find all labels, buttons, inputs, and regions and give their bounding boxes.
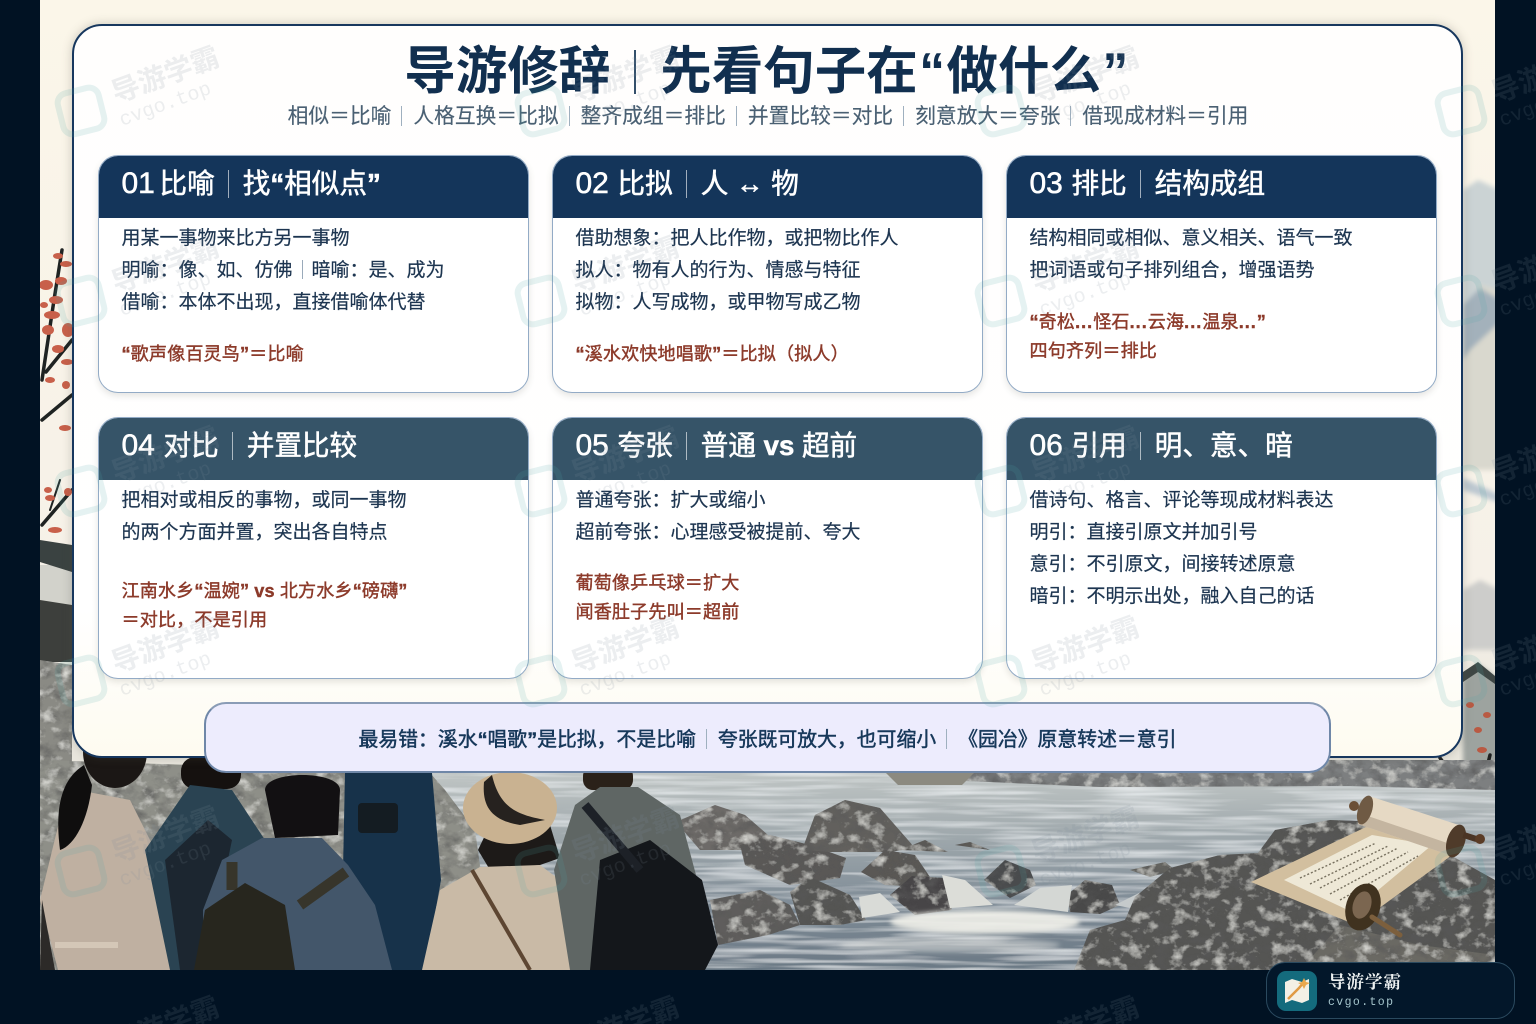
right branch [1438, 702, 1492, 760]
title: 导游修辞 先看句子在“做什么” [404, 42, 1128, 100]
text: 03 effect: 把词语或句子排列组合，增强语势 [1030, 260, 1315, 281]
panel: 06 quotation [1006, 417, 1437, 679]
example: 03 line two: 四句齐列＝排比 [1030, 340, 1157, 360]
heading: 04: 04 对比 并置比较 [122, 428, 357, 462]
person 4: guide in dark robe [343, 773, 441, 970]
watermark overlay: cvgo.top [577, 838, 675, 893]
waterfalls and foam [840, 875, 1145, 952]
watermark overlay: cvgo.top [577, 458, 675, 513]
example: 04 line one: 江南水乡“温婉” vs 北方水乡“磅礴” [122, 580, 407, 600]
heading: 06: 06 引用 明、意、暗 [1030, 428, 1293, 462]
text: 05 ordinary: 普通夸张：扩大或缩小 [576, 490, 766, 511]
heading: 01 [98, 154, 528, 218]
icon: scroll [1251, 794, 1485, 935]
text: 04 definition line two: 的两个方面并置，突出各自特点 [122, 522, 388, 543]
watermark overlay: cvgo.top [577, 268, 675, 323]
text: 06 paraphrase: 意引：不引原文，间接转述原意 [1030, 554, 1296, 575]
person 6: grey jacket with backpack [554, 766, 718, 970]
watermark overlay: cvgo.top [117, 458, 215, 513]
watermark overlay: 导游学霸 [567, 611, 683, 679]
river mid rocks [676, 800, 1175, 945]
text: 02 personification: 拟人：物有人的行为、情感与特征 [576, 260, 861, 281]
person 2: navy jacket [145, 757, 265, 970]
icon: map logo [1277, 971, 1317, 1011]
left plum tree [39, 250, 74, 533]
watermark overlay: cvgo.top [1037, 458, 1135, 513]
panel: 03 parallelism [1006, 155, 1437, 393]
watermark overlay: 导游学霸 [107, 611, 223, 679]
right mountains [1463, 180, 1500, 780]
brand badge [1266, 962, 1515, 1019]
watermark overlay: cvgo.top [1037, 838, 1135, 893]
watermark overlay: 导游学霸 [107, 801, 223, 869]
main white panel [72, 24, 1463, 758]
heading: 05: 05 夸张 普通 vs 超前 [576, 428, 857, 462]
watermark overlay: cvgo.top [1037, 648, 1135, 703]
person 1: woman in trench coat [40, 751, 170, 970]
panel: 04 contrast [98, 417, 529, 679]
text: 02 objectification: 拟物：人写成物，或甲物写成乙物 [576, 292, 861, 313]
example: 04 line two: ＝对比，不是引用 [122, 610, 267, 630]
watermark overlay: 导游学霸 [1027, 41, 1143, 109]
panel: 05 hyperbole [552, 417, 983, 679]
watermark overlay: 导游学霸 [107, 41, 223, 109]
river water [420, 760, 1495, 970]
watermark overlay: 导游学霸 [567, 421, 683, 489]
text: 03 definition: 结构相同或相似、意义相关、语气一致 [1030, 228, 1353, 249]
far bank and boat [885, 760, 1495, 790]
heading: 06 [1006, 416, 1436, 480]
heading: 05 [552, 416, 982, 480]
example: 05 line one: 葡萄像乒乓球＝扩大 [576, 572, 739, 592]
heading: 04 [98, 416, 528, 480]
text: 01 types: 明喻：像、如、仿佛 暗喻：是、成为 [122, 260, 445, 281]
watermark overlay: 导游学霸 [1027, 231, 1143, 299]
text: 01 borrowed metaphor: 借喻：本体不出现，直接借喻体代替 [122, 292, 426, 313]
panel: 01 metaphor [98, 155, 529, 393]
example: 03 line one: “奇松...怪石...云海...温泉...” [1030, 312, 1266, 332]
heading: 02 [552, 154, 982, 218]
heading: 01: 01 比喻 找“相似点” [122, 166, 381, 200]
callout: common mistakes: 最易错：溪水“唱歌”是比拟，不是比喻 夸张既可放大，也可缩小 《园冶》原意转述＝意引 [359, 729, 1176, 751]
watermark overlay: cvgo.top [117, 838, 215, 893]
heading: 02: 02 比拟 人 ↔ 物 [576, 166, 799, 200]
watermark overlay: cvgo.top [1037, 78, 1135, 133]
watermark overlay: 导游学霸 [107, 421, 223, 489]
text: 01 definition: 用某一事物来比方另一事物 [122, 228, 350, 249]
text: 06 definition: 借诗句、格言、评论等现成材料表达 [1030, 490, 1334, 511]
rocks behind the group [40, 760, 482, 970]
watermark overlay: 导游学霸 [1027, 611, 1143, 679]
text: 06 explicit: 明引：直接引原文并加引号 [1030, 522, 1258, 543]
person 3: blue jacket with backpack [194, 775, 392, 970]
watermark overlay: cvgo.top [117, 78, 215, 133]
watermark overlay: cvgo.top [577, 648, 675, 703]
example: 02: “溪水欢快地唱歌”＝比拟（拟人） [576, 344, 849, 364]
person 5: woman in straw hat [422, 773, 570, 970]
left building and rocks [40, 540, 72, 770]
foreground boulders [1074, 820, 1495, 970]
text: 05 advanced: 超前夸张：心理感受被提前、夸大 [576, 522, 861, 543]
text: 04 definition line one: 把相对或相反的事物，或同一事物 [122, 490, 407, 511]
panel: 02 personification [552, 155, 983, 393]
example: 05 line two: 闻香肚子先叫＝超前 [576, 602, 739, 622]
heading: 03 [1006, 154, 1436, 218]
heading: 03: 03 排比 结构成组 [1030, 166, 1265, 200]
watermark overlay: 导游学霸 [1027, 421, 1143, 489]
watermark overlay: cvgo.top [117, 648, 215, 703]
example: 01: “歌声像百灵鸟”＝比喻 [122, 344, 304, 364]
callout: common mistakes [204, 702, 1331, 773]
brand url: cvgo.top [1328, 996, 1394, 1009]
watermark overlay: cvgo.top [577, 78, 675, 133]
watermark overlay: 导游学霸 [567, 231, 683, 299]
watermark overlay: 导游学霸 [567, 801, 683, 869]
watermark overlay: 导游学霸 [107, 231, 223, 299]
watermark overlay: cvgo.top [117, 268, 215, 323]
watermark overlay: cvgo.top [1037, 268, 1135, 323]
watermark overlay: 导游学霸 [1027, 801, 1143, 869]
tour group seen from behind [40, 751, 718, 970]
brand name: 导游学霸 [1328, 972, 1402, 992]
subtitle: 相似＝比喻 人格互换＝比拟 整齐成组＝排比 并置比较＝对比 刻意放大＝夸张 借现成材料＝引用 [288, 105, 1248, 128]
text: 06 implicit: 暗引：不明示出处，融入自己的话 [1030, 586, 1315, 607]
text: 02 definition: 借助想象：把人比作物，或把物比作人 [576, 228, 899, 249]
watermark overlay: 导游学霸 [567, 41, 683, 109]
